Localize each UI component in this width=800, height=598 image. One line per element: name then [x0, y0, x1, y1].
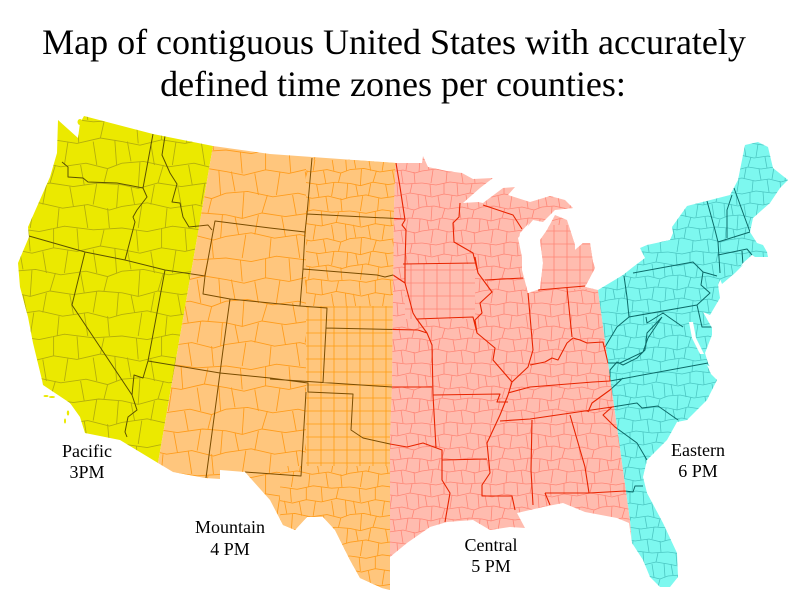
- title: defined time zones per counties:: [160, 64, 626, 104]
- label: Eastern: 6 PM: [678, 461, 718, 481]
- label: Mountain: [195, 517, 265, 559]
- Pacific time zone region: [18, 116, 213, 463]
- title: [42, 22, 746, 104]
- label: Mountain: Mountain: [195, 517, 265, 537]
- label: Eastern: Eastern: [671, 440, 725, 460]
- title: Map of contiguous United States with accurately: [42, 22, 746, 62]
- label: Pacific: [62, 441, 112, 482]
- label: Pacific: Pacific: [62, 441, 112, 461]
- label: Central: [465, 535, 517, 576]
- Eastern time zone region: [598, 142, 788, 587]
- label: Central: 5 PM: [471, 556, 511, 576]
- Central time zone region: [390, 156, 632, 557]
- label: Mountain: 4 PM: [210, 539, 250, 559]
- label: Central: Central: [465, 535, 517, 555]
- label: Eastern: [671, 440, 725, 481]
- coastal inlets: [519, 223, 717, 380]
- Mountain time zone region: [158, 146, 396, 590]
- label: Pacific: 3PM: [69, 462, 105, 482]
- islands: [44, 119, 82, 424]
